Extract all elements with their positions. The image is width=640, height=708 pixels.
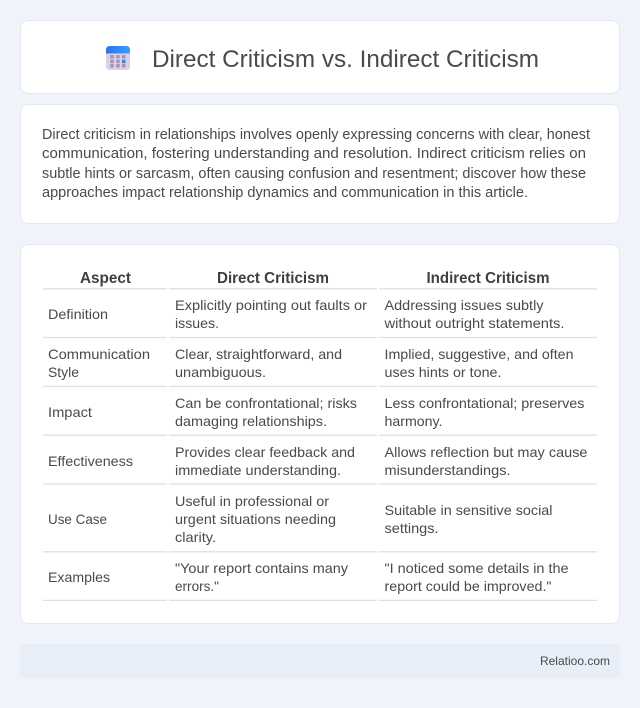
row: Communication Style: uses hints or tone.: [384, 364, 502, 380]
icon: calendar: [106, 46, 130, 70]
table header: Direct Criticism: [217, 270, 329, 287]
row: Effectiveness: misunderstandings.: [384, 462, 510, 478]
row: Use Case: urgent situations needing: [175, 511, 336, 527]
row: Use Case: clarity.: [175, 529, 216, 545]
row: Communication Style: Implied, suggestive, and often: [384, 346, 574, 362]
intro text: Direct criticism in relationships involves openly expressing concerns with clear, honest: [42, 127, 590, 143]
row: Examples: errors.": [175, 578, 219, 594]
row: Impact: Less confrontational; preserves: [384, 395, 584, 411]
row: Use Case: Useful in professional or: [175, 493, 329, 509]
table header: Aspect: [80, 270, 132, 287]
row: Examples: "Your report contains many: [175, 560, 348, 576]
row: Communication Style: [48, 346, 574, 380]
table header: [80, 270, 550, 287]
row: Impact: [48, 395, 584, 429]
footer: Relatioo.com: [540, 654, 610, 668]
row: Impact: Impact: [48, 404, 92, 420]
panel: title card: [20, 20, 620, 94]
row: Definition: without outright statements.: [383, 315, 564, 331]
intro text: communication, fostering understanding and resolution. Indirect criticism relies on: [42, 146, 586, 162]
intro text: subtle hints or sarcasm, often causing confusion and resentment; discover how these: [42, 166, 586, 182]
row: Effectiveness: [48, 444, 588, 478]
row: Definition: Explicitly pointing out faults or: [175, 297, 367, 313]
row: Effectiveness: Allows reflection but may cause: [384, 444, 588, 460]
row: Examples: report could be improved.": [384, 578, 552, 594]
row: Communication Style: unambiguous.: [175, 364, 266, 380]
row: Impact: Can be confrontational; risks: [175, 395, 357, 411]
row: Use Case: settings.: [384, 520, 438, 536]
row: Effectiveness: Effectiveness: [48, 453, 133, 469]
row: Use Case: Use Case: [48, 511, 107, 527]
row: Effectiveness: Provides clear feedback and: [175, 444, 355, 460]
row: Definition: Definition: [48, 306, 108, 322]
row: Definition: Addressing issues subtly: [384, 297, 544, 313]
row: Use Case: Suitable in sensitive social: [384, 502, 552, 518]
footer: [20, 644, 620, 678]
row: Communication Style: Clear, straightforward, and: [175, 346, 342, 362]
row: Impact: damaging relationships.: [175, 413, 327, 429]
row: Communication Style: Style: [48, 364, 79, 380]
row: Examples: [48, 560, 569, 594]
row: Effectiveness: immediate understanding.: [175, 462, 341, 478]
title: Direct Criticism vs. Indirect Criticism: [152, 46, 539, 73]
panel: comparison table: [20, 244, 620, 624]
row: Impact: harmony.: [384, 413, 442, 429]
row: Definition: issues.: [175, 315, 219, 331]
panel: introduction: [20, 104, 620, 224]
table header: Indirect Criticism: [426, 270, 550, 287]
row: Communication Style: Communication: [48, 346, 150, 362]
row: Examples: Examples: [48, 569, 110, 585]
row: Examples: "I noticed some details in the: [384, 560, 569, 576]
row: Definition: [48, 297, 564, 331]
intro text: [42, 127, 590, 201]
row: Use Case: [48, 493, 552, 545]
intro text: approaches impact relationship dynamics and communication in this article.: [42, 185, 528, 201]
